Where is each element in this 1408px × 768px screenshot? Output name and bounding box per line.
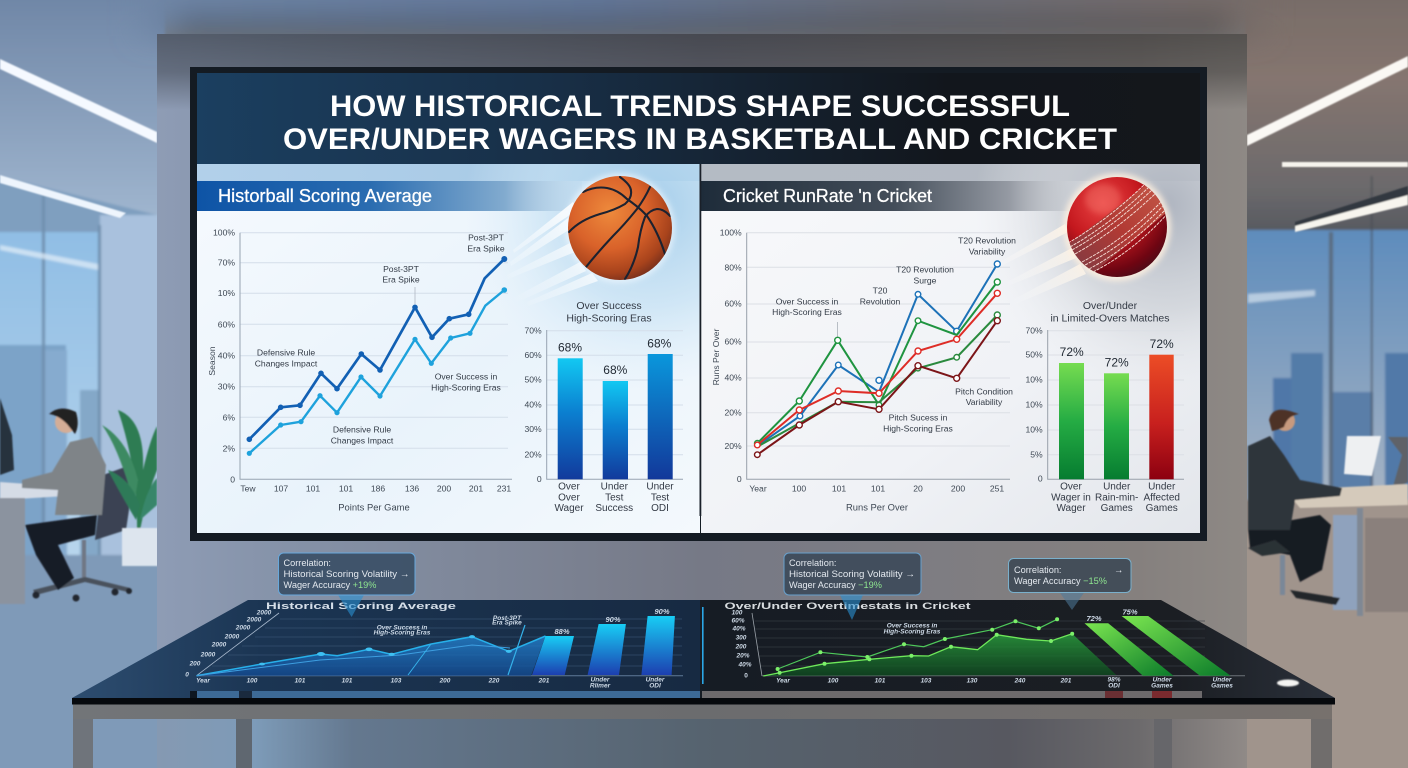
bar chart: over/under limited-overs: Games [1146, 503, 1178, 514]
table display: cricket chart: 103 [921, 678, 932, 685]
table display: basketball chart: ODI [649, 683, 661, 690]
line chart: runs per over: 101 [832, 483, 846, 493]
line chart: runs per over: 251 [990, 483, 1004, 493]
line chart: points per game [207, 227, 512, 512]
line chart: points per game: 200 [437, 483, 451, 493]
table display: basketball chart: 2000 [200, 652, 216, 659]
ceiling light strips left [0, 59, 157, 218]
line chart: points per game: 201 [469, 483, 483, 493]
bar chart: over/under limited-overs: 10% [1025, 399, 1043, 409]
bar chart: over/under limited-overs: Under [1148, 482, 1176, 493]
callout: correlation right: → [1114, 565, 1123, 575]
table display: cricket chart: 240 [1014, 678, 1026, 685]
table display: cricket chart: Over Success in [887, 623, 937, 630]
annotation: defensive rule upper [255, 347, 318, 368]
annotation: defensive rule lower: Defensive Rule [333, 424, 391, 434]
table display: basketball chart: 2000 [211, 642, 227, 649]
bar chart: over success high-scoring eras: Over Success [576, 300, 642, 312]
table display: cricket chart: 98% [1107, 677, 1121, 684]
table display: cricket chart: 100 [828, 678, 839, 685]
line chart: points per game: 0 [230, 474, 235, 484]
annotation: T20 variability [958, 235, 1016, 256]
table display: basketball chart: 103 [391, 678, 402, 685]
table display: basketball chart: 201 [538, 678, 550, 685]
line chart: runs per over: 20% [724, 441, 742, 451]
panel heading: cricket: Cricket RunRate 'n Cricket [723, 185, 932, 206]
callout: correlation right: Wager Accuracy −15% [1014, 576, 1107, 586]
annotation: T20 surge: Surge [914, 275, 937, 285]
bar chart: over/under limited-overs: 0 [1038, 473, 1043, 483]
table display: cricket chart: 40% [731, 626, 746, 633]
table display: cricket chart: Year [776, 678, 790, 685]
table display: basketball chart: Rlimer [590, 683, 611, 690]
table display: cricket chart: 130 [967, 678, 978, 685]
table display: basketball chart: 2000 [235, 625, 251, 632]
annotation: pitch condition [955, 386, 1013, 407]
annotation: defensive rule lower [331, 424, 394, 445]
line chart: points per game: 107 [274, 483, 288, 493]
annotation: over success [431, 371, 501, 392]
bar chart: over/under limited-overs: 70% [1025, 325, 1043, 335]
bar chart: over success high-scoring eras: 68% [558, 341, 582, 355]
bar chart: over success high-scoring eras: Success [595, 503, 633, 514]
wall-mounted screen [190, 67, 1207, 541]
bar chart: over success high-scoring eras: ODI [651, 503, 669, 514]
table display: cricket chart: Under [1153, 677, 1172, 684]
divider on table [702, 607, 704, 684]
annotation: T20 surge: T20 Revolution [896, 264, 954, 274]
bar chart: over success high-scoring eras: Under [601, 482, 629, 493]
bar chart: over/under limited-overs [1025, 300, 1184, 514]
annotation: post-3PT top: Post-3PT [468, 232, 505, 242]
bar chart: over success high-scoring eras: Over [558, 482, 581, 493]
line chart: points per game: 136 [405, 483, 419, 493]
table display: cricket chart: 200 [735, 644, 747, 651]
table display: cricket chart: 60% [731, 618, 745, 625]
callout: correlation right: Correlation: [1014, 565, 1062, 575]
line chart: runs per over: Runs Per Over [711, 328, 721, 385]
table display: cricket chart: Under [1213, 677, 1232, 684]
bar chart: over success high-scoring eras: 68% [647, 337, 672, 351]
line chart: runs per over: Runs Per Over [846, 501, 908, 512]
person at desk left [0, 398, 136, 604]
table display: basketball chart [185, 601, 683, 690]
data line: red [754, 290, 1000, 448]
annotation: over success: Over Success in [435, 371, 497, 381]
annotation: T20 variability: Variability [969, 246, 1006, 256]
line chart: runs per over [711, 227, 1016, 512]
annotation: pitch success [883, 412, 953, 433]
panel heading: cricket [701, 181, 1086, 211]
line chart: points per game: 6% [223, 412, 235, 422]
bar chart: over success high-scoring eras: High-Scoring Eras [566, 312, 652, 324]
annotation: post-3PT top: Era Spike [467, 243, 505, 253]
annotation: pitch success: Pitch Sucess in [889, 412, 948, 422]
table display: basketball chart: 101 [342, 678, 353, 685]
table display: cricket chart: 72% [1086, 614, 1102, 623]
data line: dark green [757, 312, 1000, 447]
callout: correlation centre: Wager Accuracy −19% [789, 580, 882, 590]
table display: basketball chart: 220 [488, 678, 500, 685]
annotation: post-3PT top [467, 232, 505, 253]
bar chart: over/under limited-overs: Affected [1143, 492, 1180, 503]
callout: correlation centre [784, 553, 921, 620]
line chart: points per game: 186 [371, 483, 385, 493]
table display: cricket chart: 100 [732, 610, 743, 617]
icon: motion streaks [515, 202, 598, 298]
office background: left blue side [0, 0, 165, 768]
table display: cricket chart: 201 [1060, 678, 1072, 685]
bar chart: over success high-scoring eras: 40% [524, 399, 542, 409]
data line: dark blue [246, 256, 507, 442]
bar chart: over/under limited-overs: 10% [1025, 424, 1043, 434]
table display: basketball chart: 200 [439, 678, 451, 685]
line chart: points per game: 100% [213, 227, 235, 237]
callout: correlation left: Correlation: [284, 558, 331, 568]
annotation: T20 revolution [860, 285, 901, 306]
line chart: runs per over: 60% [724, 336, 742, 346]
annotation: post-3PT middle [382, 264, 420, 284]
line chart: points per game: Season [207, 346, 217, 376]
data line: maroon [754, 318, 1000, 458]
callout: correlation left: Wager Accuracy +19% [284, 580, 376, 590]
bar chart: over success high-scoring eras: Over [558, 492, 581, 503]
line chart: points per game: 30% [218, 381, 235, 391]
person at desk right [1248, 410, 1408, 616]
line chart: runs per over: 101 [871, 483, 885, 493]
bar chart: over success high-scoring eras [524, 300, 683, 514]
bar chart: over success high-scoring eras: 30% [524, 424, 542, 434]
table display: basketball chart: 0 [185, 672, 189, 679]
annotation: pitch condition: Variability [966, 397, 1003, 407]
bar chart: over success high-scoring eras: 0 [537, 474, 542, 484]
annotation: over success [772, 296, 842, 317]
line chart: runs per over: 0 [737, 474, 742, 484]
data line: blue [757, 261, 1000, 446]
table display: cricket chart: Games [1211, 683, 1233, 690]
table display: basketball chart: 90% [605, 615, 621, 624]
line chart: points per game: 101 [339, 483, 353, 493]
annotation: T20 variability: T20 Revolution [958, 235, 1016, 245]
annotation: pitch success: High-Scoring Eras [883, 423, 953, 433]
bar chart: over/under limited-overs: 5% [1030, 449, 1043, 459]
bar chart: over success high-scoring eras: Under [646, 482, 674, 493]
table display: basketball chart: Under [646, 677, 665, 684]
table display: basketball chart: Era Spike [492, 620, 522, 627]
icon: basketball [565, 173, 675, 283]
bar chart: over success high-scoring eras: 50% [524, 374, 542, 384]
ceiling band above the wall [140, 0, 1265, 36]
annotation: over success: High-Scoring Eras [431, 382, 501, 392]
bar chart: over/under limited-overs: Rain-min- [1095, 492, 1138, 503]
potted plant [102, 410, 158, 566]
table frame and legs [73, 704, 1332, 768]
bar chart: over success high-scoring eras: Test [605, 492, 624, 503]
bar chart: over success high-scoring eras: 70% [524, 325, 542, 335]
annotation: defensive rule upper: Defensive Rule [257, 347, 315, 357]
table display: cricket chart: High-Scoring Eras [884, 629, 941, 636]
icon: motion streaks [1022, 224, 1086, 291]
table display: basketball chart: 2000 [224, 634, 240, 641]
bar chart: over/under limited-overs: 72% [1105, 356, 1129, 370]
bar chart: over/under limited-overs: 10% [1025, 374, 1043, 384]
annotation: T20 revolution: Revolution [860, 296, 901, 306]
line chart: points per game: 231 [497, 483, 511, 493]
bar chart: over success high-scoring eras: 20% [524, 449, 542, 459]
table display: cricket chart: Over/Under Overtimestats in Cricket [724, 601, 971, 611]
line chart: runs per over: 100% [720, 227, 742, 237]
line chart: runs per over: 100 [792, 483, 806, 493]
bar chart: over success high-scoring eras: Test [651, 492, 669, 503]
table display: basketball chart: 101 [295, 678, 306, 685]
annotation: pitch condition: Pitch Condition [955, 386, 1013, 396]
table display: basketball chart: 2000 [256, 610, 272, 617]
callout: correlation right [1008, 558, 1131, 610]
bar chart: over/under limited-overs: Games [1101, 503, 1133, 514]
bar chart: over/under limited-overs: Wager in [1051, 492, 1091, 503]
data line: light blue [247, 287, 507, 456]
table display: basketball chart: Over Success in [377, 625, 427, 632]
bar chart: over/under limited-overs: Over/Under [1083, 300, 1138, 312]
panel: cricket [701, 164, 1200, 533]
annotation: post-3PT middle: Era Spike [382, 274, 420, 284]
bar chart: over success high-scoring eras: Wager [554, 503, 584, 514]
panel heading: basketball [197, 181, 582, 211]
title band: OVER/UNDER WAGERS IN BASKETBALL AND CRICKET [283, 123, 1117, 156]
line chart: runs per over: 40% [724, 372, 742, 382]
table display: cricket chart: 40% [737, 662, 752, 669]
bar chart: over/under limited-overs: Wager [1056, 503, 1086, 514]
callout: correlation centre: Correlation: [789, 558, 836, 568]
callout: correlation left [278, 553, 415, 617]
back wall [157, 34, 1247, 768]
table display: cricket chart: ODI [1108, 683, 1120, 690]
annotation: T20 surge [896, 264, 954, 285]
annotation: defensive rule lower: Changes Impact [331, 435, 394, 445]
table display: cricket chart: 300 [736, 635, 747, 642]
line chart: runs per over: Year [749, 483, 767, 493]
office background: right warm side [1245, 0, 1408, 768]
callout: correlation left: Historical Scoring Volatility → [284, 569, 410, 579]
table display: cricket chart: 101 [875, 678, 886, 685]
table display: basketball chart: 200 [189, 661, 201, 668]
table display: cricket chart: Games [1151, 683, 1173, 690]
line chart: runs per over: 20 [913, 483, 923, 493]
annotation: T20 revolution: T20 [873, 285, 888, 295]
bar chart: over/under limited-overs: in Limited-Overs Matches [1050, 312, 1170, 324]
table display: basketball chart: Historical Scoring Average [266, 601, 456, 611]
table display: basketball chart: Under [591, 677, 610, 684]
table display: basketball chart: 90% [654, 607, 670, 616]
bar chart: over success high-scoring eras: 60% [524, 350, 542, 360]
table display: basketball chart: Year [196, 678, 210, 685]
bar chart: over success high-scoring eras: 68% [603, 363, 628, 377]
table display: basketball chart: Post-3PT [493, 615, 522, 622]
title band [197, 73, 1200, 164]
bar chart: over/under limited-overs: Over [1060, 482, 1083, 493]
table display: cricket chart: 0 [744, 673, 748, 680]
panel: basketball [197, 164, 700, 533]
line chart: points per game: 70% [218, 257, 235, 267]
line chart: points per game: 40% [218, 350, 235, 360]
line chart: points per game: 2% [223, 443, 235, 453]
callout: correlation centre: Historical Scoring Volatility → [789, 569, 915, 579]
line chart: points per game: Tew [240, 483, 256, 493]
table display: basketball chart: 2000 [246, 617, 262, 624]
table display: basketball chart: High-Scoring Eras [374, 630, 431, 637]
line chart: points per game: Points Per Game [338, 501, 410, 512]
table display: cricket chart [724, 601, 1245, 690]
line chart: points per game: 60% [218, 319, 235, 329]
line chart: points per game: 10% [218, 288, 235, 298]
bar chart: over/under limited-overs: 72% [1060, 345, 1084, 359]
annotation: over success: Over Success in [776, 296, 838, 306]
line chart: runs per over: 200 [951, 483, 965, 493]
bar chart: over/under limited-overs: Under [1103, 482, 1131, 493]
glass table top [72, 600, 1335, 704]
panel heading: basketball: Historball Scoring Average [218, 185, 432, 206]
table display: basketball chart: 88% [554, 627, 570, 636]
annotation: defensive rule upper: Changes Impact [255, 358, 318, 368]
line chart: runs per over: 80% [724, 262, 742, 272]
table display: cricket chart: 20% [735, 653, 750, 660]
annotation: post-3PT middle: Post-3PT [383, 264, 420, 274]
icon: cricket ball [1063, 173, 1172, 281]
bar chart: over/under limited-overs: 72% [1150, 337, 1174, 351]
table display: basketball chart: 100 [247, 678, 258, 685]
annotation: over success: High-Scoring Eras [772, 307, 842, 317]
table display: cricket chart: 75% [1122, 608, 1138, 617]
line chart: runs per over: 20% [724, 407, 742, 417]
line chart: points per game: 101 [306, 483, 320, 493]
bar chart: over/under limited-overs: 50% [1025, 349, 1043, 359]
data line: green [754, 279, 1000, 446]
line chart: runs per over: 60% [724, 298, 742, 308]
ceiling lights and hanging lamp right [1247, 56, 1408, 232]
title band: HOW HISTORICAL TRENDS SHAPE SUCCESSFUL [330, 90, 1070, 123]
